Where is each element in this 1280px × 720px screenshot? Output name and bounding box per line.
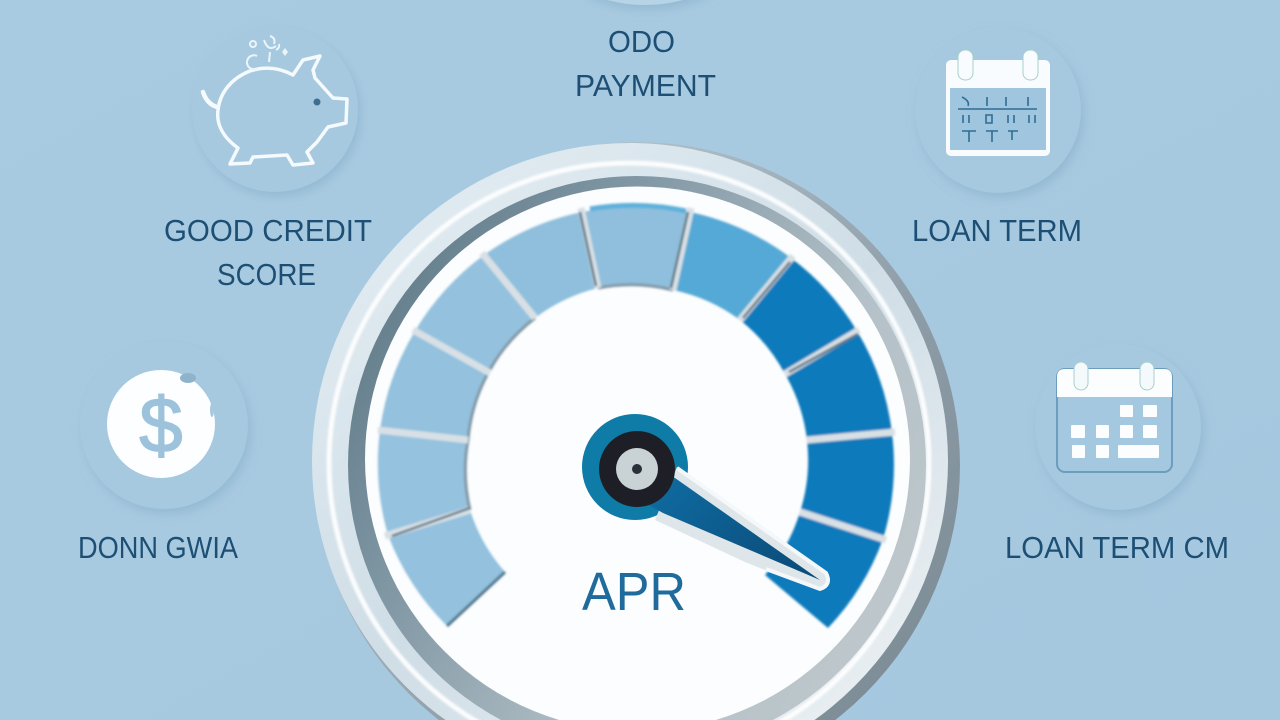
icon: calendar with squares bbox=[1035, 344, 1201, 510]
label: odo payment: ODO bbox=[608, 24, 675, 59]
icon: dollar coin bbox=[80, 341, 248, 509]
label: odo payment: PAYMENT bbox=[575, 68, 716, 103]
hub outer ring bbox=[582, 414, 688, 520]
label: loan term cm: LOAN TERM CM bbox=[1005, 530, 1229, 565]
hub and needle bbox=[582, 414, 829, 590]
icon: calendar with glyphs bbox=[915, 27, 1081, 193]
gauge dial segments bbox=[378, 205, 895, 628]
icon: piggy bank bbox=[192, 26, 358, 192]
hub center bbox=[599, 431, 675, 507]
label: down payment: DONN GWIA bbox=[78, 530, 238, 565]
gauge bezel bbox=[312, 142, 960, 720]
label: good credit score: SCORE bbox=[217, 257, 316, 292]
needle bbox=[640, 467, 829, 590]
label: loan term: LOAN TERM bbox=[912, 213, 1082, 248]
label: good credit score bbox=[164, 213, 372, 292]
label: odo payment bbox=[575, 24, 716, 103]
label: good credit score: GOOD CREDIT bbox=[164, 213, 372, 248]
gauge bbox=[312, 142, 960, 720]
icon: dollar coin: $ bbox=[139, 381, 183, 469]
APR label: APR bbox=[582, 562, 686, 622]
icon: top payment circle bbox=[550, 0, 740, 5]
